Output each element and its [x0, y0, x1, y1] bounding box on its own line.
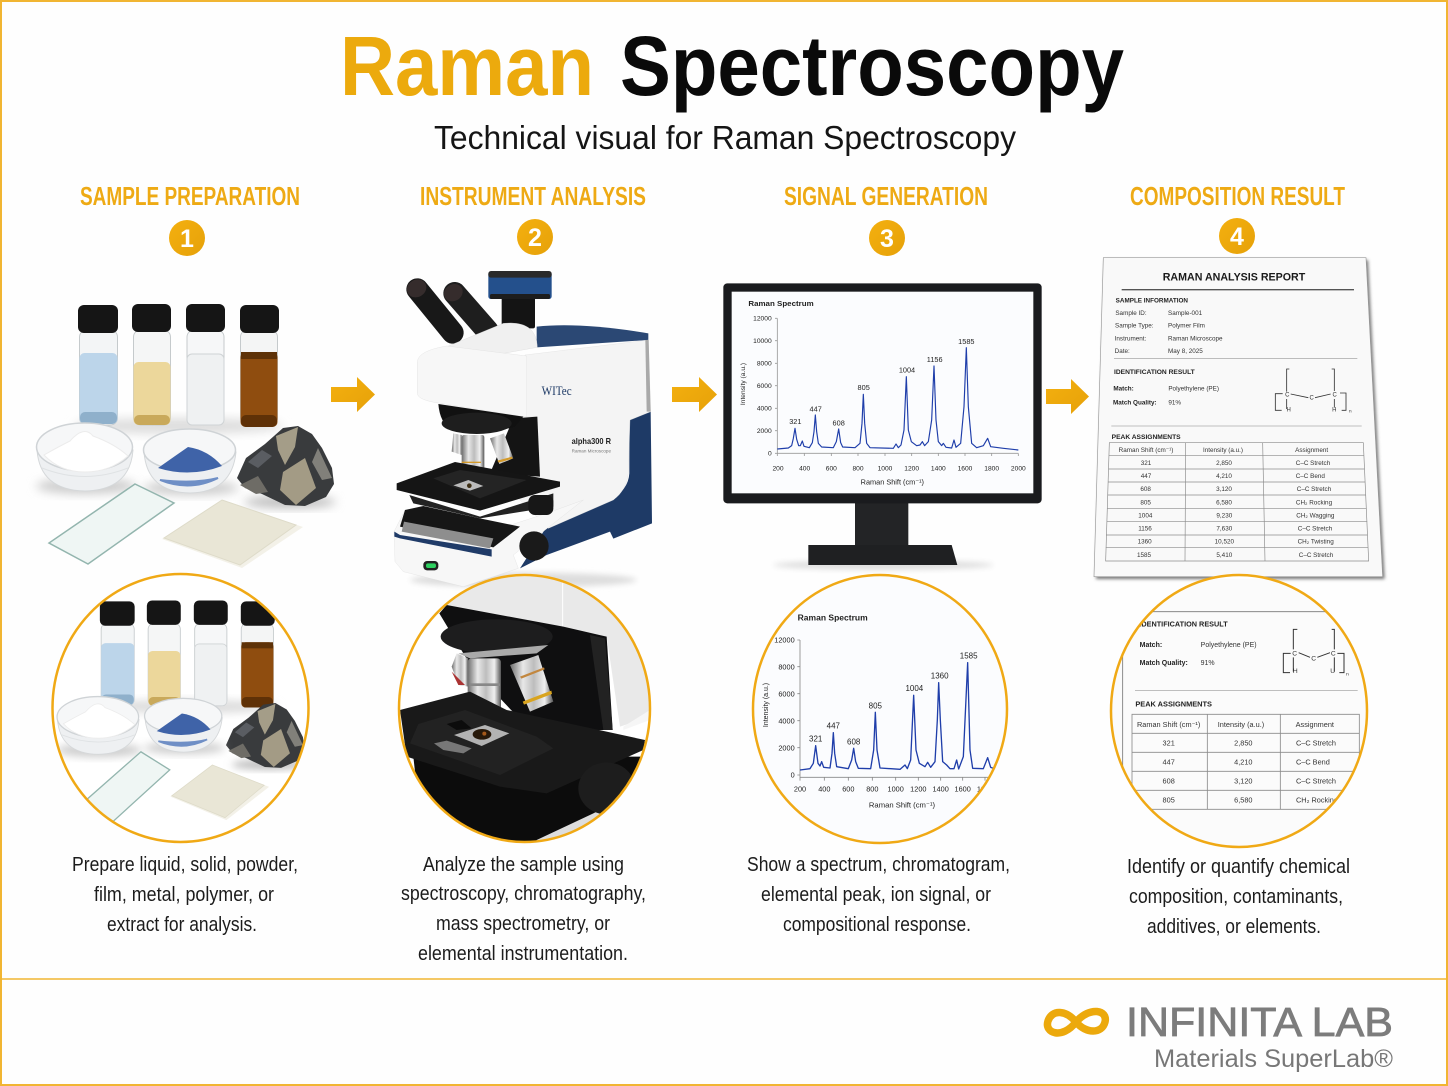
- arrow 1: [331, 377, 375, 412]
- step 1 badge: 1: [180, 225, 194, 253]
- step 2 description: spectroscopy, chromatography,: [401, 883, 646, 905]
- logo: [1047, 999, 1394, 1073]
- zoom circle 4: report detail: 2,850: [1234, 739, 1253, 748]
- zoom circle 3: spectrum detail: 200: [794, 785, 806, 794]
- zoom circle 3: spectrum detail: 0: [791, 771, 795, 780]
- analysis report: Instrument:: [1115, 335, 1147, 342]
- analysis report: Sample ID:: [1115, 310, 1147, 317]
- peak table: 1156: [1138, 526, 1152, 533]
- screen chart: [740, 299, 1026, 487]
- polyethylene structure detail: C: [1331, 650, 1336, 657]
- zoom circle 3: spectrum detail: 1600: [955, 785, 971, 794]
- analysis report: RAMAN ANALYSIS REPORT: [1163, 272, 1306, 284]
- zoom circle 4: report detail: PEAK ASSIGNMENTS: [1135, 700, 1212, 709]
- zoom circle 4: report detail: C–C Stretch: [1296, 739, 1336, 748]
- zoom circle 4: report detail: 91%: [1201, 660, 1215, 667]
- screen chart: 10000: [753, 338, 772, 345]
- peak table: 9,230: [1216, 512, 1233, 519]
- zoom circle 4: report detail: Match Quality:: [1140, 660, 1188, 667]
- zoom circle 3: spectrum detail: 608: [847, 737, 861, 746]
- step 3 description: [747, 854, 1010, 936]
- step 2 badge: [517, 219, 553, 255]
- screen chart: 1000: [878, 465, 893, 472]
- peak table: 608: [1140, 486, 1151, 493]
- infinity icon: [1047, 1011, 1105, 1033]
- screen chart: 200: [772, 465, 784, 472]
- zoom circle 3: spectrum detail: 1360: [931, 671, 949, 680]
- logo: INFINITA LAB: [1126, 999, 1393, 1045]
- screen chart: 447: [810, 404, 822, 413]
- zoom circle 3: spectrum detail: 1800: [977, 785, 993, 794]
- step 4 description: composition, contaminants,: [1129, 886, 1343, 908]
- zoom circle 4: report detail: 608: [1163, 777, 1175, 786]
- polyethylene structure detail: C: [1292, 651, 1297, 658]
- screen chart: 600: [826, 465, 837, 472]
- screen chart: Raman Spectrum: [748, 299, 814, 308]
- step 2 description: mass spectrometry, or: [436, 913, 610, 935]
- zoom circle 3: spectrum detail: 1200: [910, 785, 926, 794]
- screen chart: 12000: [753, 316, 772, 323]
- screen chart: 608: [833, 418, 845, 427]
- screen chart: 400: [799, 465, 811, 472]
- analysis report: PEAK ASSIGNMENTS: [1112, 434, 1181, 441]
- peak table: 805: [1140, 499, 1151, 506]
- arm recess: [490, 417, 540, 477]
- screen chart: 800: [852, 465, 864, 472]
- objectives: [452, 433, 513, 470]
- analysis report: Sample-001: [1168, 310, 1203, 317]
- analysis report: Sample Type:: [1115, 323, 1154, 330]
- step 3 description: elemental peak, ion signal, or: [761, 884, 991, 906]
- logo text: WITec: [542, 384, 572, 398]
- zoom circle 3: spectrum detail: 321: [809, 735, 823, 744]
- step 3 description: compositional response.: [783, 914, 971, 936]
- screen chart: 321: [789, 417, 801, 426]
- zoom circle 4: report detail: C–C Bend: [1296, 758, 1330, 767]
- screen chart: 1600: [958, 465, 973, 472]
- peak table: Assignment: [1295, 447, 1328, 454]
- zoom circle 4: report detail: Polyethylene (PE): [1201, 642, 1257, 649]
- step 4 badge: [1219, 218, 1255, 254]
- screen chart: 1200: [904, 465, 919, 472]
- zoom circle 3: spectrum detail: 400: [818, 785, 830, 794]
- screen chart: 1585: [958, 337, 974, 346]
- analysis report: Match Quality:: [1113, 400, 1157, 407]
- step 3 heading: SIGNAL GENERATION: [784, 181, 988, 211]
- arrow 3: [1046, 379, 1089, 414]
- zoom circle 3: spectrum detail: Intensity (a.u.): [763, 683, 770, 727]
- polyethylene structure detail: U: [1330, 668, 1335, 675]
- peak table: 447: [1141, 473, 1152, 480]
- step 3 badge: 3: [880, 225, 894, 253]
- zoom circle 4: report detail: 6,580: [1234, 796, 1253, 805]
- analysis report: 91%: [1168, 400, 1181, 407]
- zoom circle 3: spectrum detail: 1000: [888, 785, 904, 794]
- main body: [513, 340, 651, 528]
- analysis report: May 8, 2025: [1168, 348, 1203, 355]
- zoom circle 4: report detail: CH₂ Rocking: [1296, 796, 1338, 805]
- analysis report: [1094, 258, 1385, 579]
- step 2 description: Analyze the sample using: [423, 854, 624, 876]
- analysis report: Polyethylene (PE): [1168, 385, 1219, 392]
- polyethylene structure: C: [1333, 392, 1338, 398]
- zoom circle 3: spectrum detail: 4000: [778, 716, 795, 725]
- step 1 heading: SAMPLE PREPARATION: [80, 181, 300, 211]
- eyepieces: [404, 276, 487, 333]
- zoom circle 4: report detail: Assignment: [1296, 720, 1334, 729]
- zoom circle 3: spectrum detail: 1585: [960, 652, 978, 661]
- sample kit: vials, powders, rock, slide, film: [36, 304, 336, 568]
- analysis report: Match:: [1113, 385, 1134, 392]
- peak table: 3,120: [1216, 486, 1232, 493]
- zoom circle 3: spectrum detail: 8000: [778, 662, 795, 671]
- polyethylene structure detail: n: [1346, 672, 1349, 678]
- zoom circle 3: spectrum detail: 805: [869, 701, 883, 710]
- microscope: Raman Microscope: [572, 448, 611, 454]
- peak table: [1106, 443, 1369, 561]
- title: [340, 19, 1124, 113]
- zoom circle 4: report detail: Raman Shift (cm⁻¹): [1137, 720, 1200, 729]
- zoom circle 3: spectrum detail: 12000: [774, 636, 795, 645]
- top cover: [537, 325, 648, 347]
- zoom circle 3: spectrum detail: 447: [827, 721, 841, 730]
- zoom circle 4: report detail: 805: [1163, 796, 1175, 805]
- peak table: 10,520: [1215, 539, 1234, 546]
- zoom circle 4: report detail: IDENTIFICATION RESULT: [1139, 620, 1228, 629]
- screen chart: 1004: [899, 366, 915, 375]
- screen chart: 0: [768, 451, 772, 458]
- step 1 description: Prepare liquid, solid, powder,: [72, 854, 298, 876]
- screen chart: Intensity (a.u.): [740, 363, 747, 405]
- step 1 description: [72, 854, 298, 936]
- polyethylene structure detail: C: [1311, 656, 1316, 663]
- screen chart: 2000: [757, 428, 772, 435]
- zoom circle 2: objective and stage: [399, 575, 650, 847]
- step 1 description: film, metal, polymer, or: [94, 884, 274, 906]
- analysis report: IDENTIFICATION RESULT: [1114, 369, 1195, 376]
- zoom circle 3: spectrum detail: 1004: [905, 684, 924, 693]
- zoom circle 4: report detail: 4,210: [1234, 758, 1253, 767]
- analysis report: SAMPLE INFORMATION: [1116, 298, 1188, 305]
- step 1 description: extract for analysis.: [107, 914, 257, 936]
- microscope: [394, 271, 652, 587]
- peak table: C–C Stretch: [1298, 526, 1333, 533]
- step 4 description: [1127, 856, 1350, 938]
- step 3 description: Show a spectrum, chromatogram,: [747, 854, 1010, 876]
- polyethylene structure: n: [1349, 408, 1352, 413]
- peak table: 5,410: [1216, 552, 1233, 559]
- screen chart: 8000: [757, 361, 772, 368]
- screen chart: Raman Shift (cm⁻¹): [861, 478, 924, 487]
- analysis report: Date:: [1115, 348, 1130, 355]
- step 4 description: additives, or elements.: [1147, 916, 1321, 938]
- monitor: [723, 283, 1042, 570]
- green LED: [423, 561, 438, 570]
- polyethylene structure detail: H: [1293, 668, 1298, 675]
- title: Raman: [340, 19, 594, 113]
- microscope: alpha300 R: [572, 436, 611, 446]
- zoom circle 4: report detail: C–C Stretch: [1296, 777, 1336, 786]
- stage: [397, 462, 560, 518]
- analysis report: Raman Microscope: [1168, 335, 1223, 342]
- screen chart: 4000: [757, 406, 772, 413]
- logo: Materials SuperLab®: [1154, 1045, 1394, 1073]
- peak table: 6,580: [1216, 499, 1232, 506]
- peak table: C–C Stretch: [1299, 552, 1334, 559]
- peak table: C–C Bend: [1296, 473, 1325, 480]
- screen chart: 6000: [757, 383, 772, 390]
- peak table: 4,210: [1216, 473, 1232, 480]
- polyethylene structure: C: [1285, 393, 1290, 399]
- step 2 badge: 2: [528, 224, 542, 252]
- zoom circle 4: report detail: 321: [1163, 739, 1175, 748]
- step 4 heading: COMPOSITION RESULT: [1130, 181, 1345, 211]
- peak table: 321: [1141, 460, 1152, 467]
- zoom circle 4: report detail: Match:: [1140, 642, 1162, 649]
- peak table: CH₂ Rocking: [1296, 499, 1333, 506]
- step 3 badge: [869, 220, 905, 256]
- zoom circle 3: spectrum detail: 600: [842, 785, 854, 794]
- focus knob: [519, 531, 549, 561]
- screen chart: 1800: [984, 465, 999, 472]
- polyethylene structure detail: [1283, 629, 1349, 678]
- step 2 heading: INSTRUMENT ANALYSIS: [420, 181, 646, 211]
- zoom circle 4: report detail: 3,120: [1234, 777, 1253, 786]
- camera: [488, 271, 552, 328]
- blue rear column: [520, 412, 652, 568]
- step 2 description: [401, 854, 646, 965]
- screen chart: 1400: [931, 465, 946, 472]
- polyethylene structure: [1275, 369, 1352, 414]
- screen chart: 2000: [1011, 465, 1026, 472]
- polyethylene structure: H: [1332, 408, 1336, 414]
- peak table: CH₂ Twisting: [1298, 539, 1334, 546]
- nosepiece: [438, 404, 523, 434]
- peak table: Raman Shift (cm⁻¹): [1119, 447, 1173, 454]
- step 1 badge: [169, 220, 205, 256]
- arrow 2: [672, 377, 717, 412]
- knob right of stage: [528, 495, 553, 515]
- zoom circle 3: spectrum detail: 1400: [933, 785, 949, 794]
- zoom circle 4: report detail: [1100, 570, 1380, 847]
- zoom circle 1: samples: [52, 574, 308, 842]
- peak table: 1004: [1138, 512, 1153, 519]
- zoom circle 3: spectrum detail: [753, 575, 1007, 843]
- zoom circle 3: spectrum detail: 2000: [778, 743, 795, 752]
- subtitle: Technical visual for Raman Spectroscopy: [434, 119, 1016, 156]
- peak table: 1585: [1137, 552, 1152, 559]
- screen chart: 805: [858, 383, 870, 392]
- zoom circle 3: spectrum detail: 800: [866, 785, 878, 794]
- zoom circle 3: spectrum detail: Raman Spectrum: [798, 613, 868, 622]
- analysis report: Polymer Film: [1168, 323, 1205, 330]
- title: Spectroscopy: [620, 19, 1124, 113]
- peak table: Intensity (a.u.): [1203, 447, 1243, 454]
- peak table: 2,850: [1216, 460, 1232, 467]
- head: [448, 323, 537, 354]
- zoom circle 3: spectrum detail: 6000: [778, 689, 795, 698]
- peak table: C–C Stretch: [1296, 460, 1331, 467]
- peak table: CH₂ Wagging: [1296, 512, 1335, 519]
- screen chart: 1156: [927, 355, 943, 364]
- zoom circle 4: report detail: 447: [1163, 758, 1175, 767]
- zoom circle 3: spectrum detail: Raman Shift (cm⁻¹): [869, 801, 936, 810]
- step 4 description: Identify or quantify chemical: [1127, 856, 1350, 878]
- polyethylene structure: H: [1287, 408, 1291, 414]
- peak table: C–C Stretch: [1297, 486, 1332, 493]
- step 4 badge: 4: [1230, 223, 1244, 251]
- peak table: 7,630: [1216, 526, 1233, 533]
- step 2 description: elemental instrumentation.: [418, 943, 628, 965]
- zoom circle 4: report detail: Intensity (a.u.): [1218, 720, 1264, 729]
- polyethylene structure: C: [1310, 396, 1315, 402]
- base: [394, 500, 583, 587]
- peak table: 1360: [1138, 539, 1152, 546]
